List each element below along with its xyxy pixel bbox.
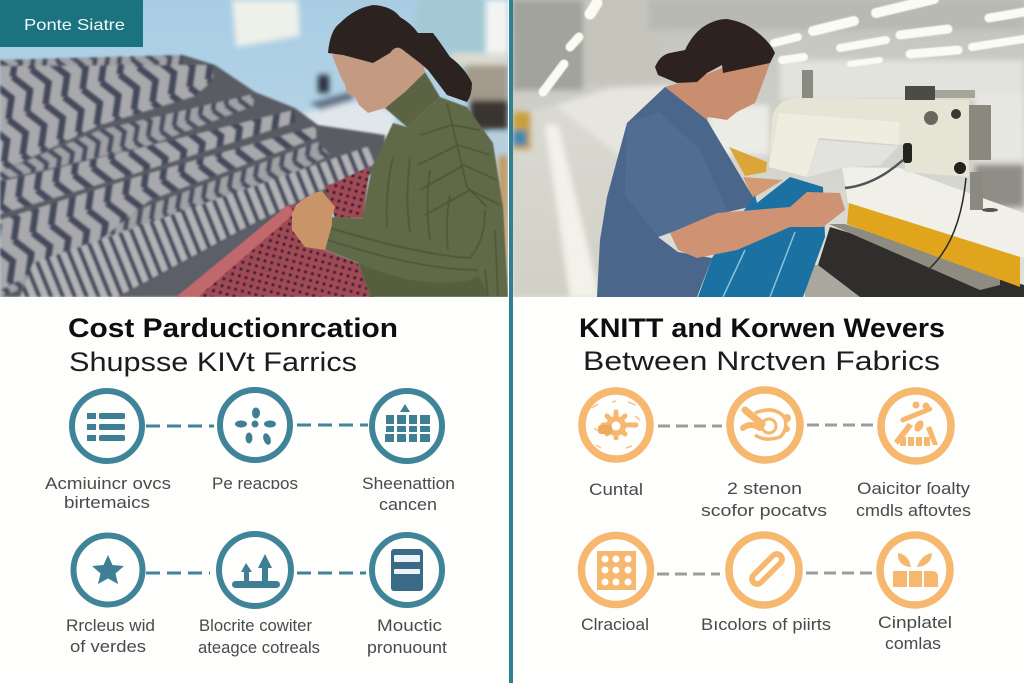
blue fabric: [698, 177, 825, 297]
icon: gift: [880, 535, 950, 605]
icon: link: [729, 535, 799, 605]
labels: right panel row 2: Cinplatel: [878, 614, 952, 632]
labels: left panel row 1: cancen: [379, 496, 437, 514]
labels: left panel row 1: [45, 475, 455, 514]
header tab: [0, 0, 143, 47]
sewing table: [842, 167, 1024, 258]
labels: left panel row 1: Sheenattion: [362, 475, 455, 493]
yellow rail: [847, 203, 1020, 287]
yellow cloth: [729, 147, 767, 176]
labels: right panel row 1: Cuntal: [589, 481, 643, 499]
labels: left panel row 2: [66, 617, 447, 657]
floor below machine: [805, 265, 865, 297]
woman: hands: [292, 191, 335, 250]
icon: building grid: [372, 391, 442, 461]
labels: left panel row 2: Rrcleus wid: [66, 617, 155, 635]
worker: forearm and hand: [670, 192, 845, 258]
labels: right panel row 1: cmdls aftovtes: [856, 502, 971, 520]
fabric pile: [0, 55, 385, 297]
worker: face and neck: [665, 63, 770, 125]
icon: swirl tool: [730, 390, 800, 460]
heading: right: [579, 313, 945, 376]
icon: weaver: [881, 391, 951, 461]
woman: sweater: [325, 72, 508, 297]
dark machinery base: [818, 227, 1024, 297]
heading: left: Cost Parductionrcation: [68, 313, 398, 343]
labels: left panel row 2: of verdes: [70, 638, 146, 656]
connectors: left: [146, 425, 368, 573]
labels: right panel row 2: Bıcolors of piirts: [701, 616, 831, 634]
heading: left: Shupsse KIVt Farrics: [69, 347, 357, 377]
heading: left: [68, 313, 398, 377]
heading: right: KNITT and Korwen Wevers: [579, 313, 945, 343]
labels: left panel row 2: Mouctic: [377, 617, 442, 635]
labels: left panel row 2: pronuount: [367, 639, 447, 657]
icon: star: [74, 536, 142, 604]
divider: [509, 0, 513, 683]
header tab: Ponte Siatre: [24, 17, 125, 34]
worker: blue top: [597, 87, 757, 297]
labels: right panel row 1: scofor pocatvs: [701, 502, 827, 520]
worker: hair: [655, 19, 775, 83]
woman: face and neck: [332, 45, 425, 113]
ceiling lights: [543, 0, 1024, 92]
labels: right panel row 2: [581, 614, 952, 653]
labels: right panel row 2: comlas: [885, 635, 941, 653]
labels: right panel row 2: Clracioal: [581, 616, 649, 634]
labels: right panel row 1: Oaicitor ſoalty: [857, 480, 971, 498]
woman: hair and ponytail: [328, 5, 472, 102]
icon: arrows: [219, 534, 291, 606]
icon: flower: [220, 390, 290, 460]
icon: dotted grid: [582, 536, 650, 604]
icon: document: [372, 535, 442, 605]
labels: left panel row 2: ateagce cotreals: [198, 639, 320, 657]
labels: left panel row 2: Blocrite cowiter: [199, 617, 313, 635]
labels: right panel row 1: 2 stenon: [727, 480, 802, 498]
labels: right panel row 1: [589, 480, 971, 520]
panel: right photo, worker at sewing machine: [513, 0, 1024, 297]
panel: left photo, woman inspecting knit fabric: [0, 0, 508, 297]
labels: left panel row 1: birtemaics: [64, 494, 150, 512]
labels: left panel row 1: Acmiuincr ovcs: [45, 475, 171, 493]
heading: right: Between Nrctven Fabrics: [583, 346, 940, 376]
sewing machine: [769, 70, 998, 268]
icon: list: [72, 391, 142, 461]
red checked fabric: [176, 167, 374, 297]
labels: left panel row 1: Pe reacɒos: [212, 475, 298, 493]
connectors: right: [657, 425, 875, 574]
worker: arm behind: [743, 177, 783, 198]
icon: gear: [582, 391, 650, 459]
